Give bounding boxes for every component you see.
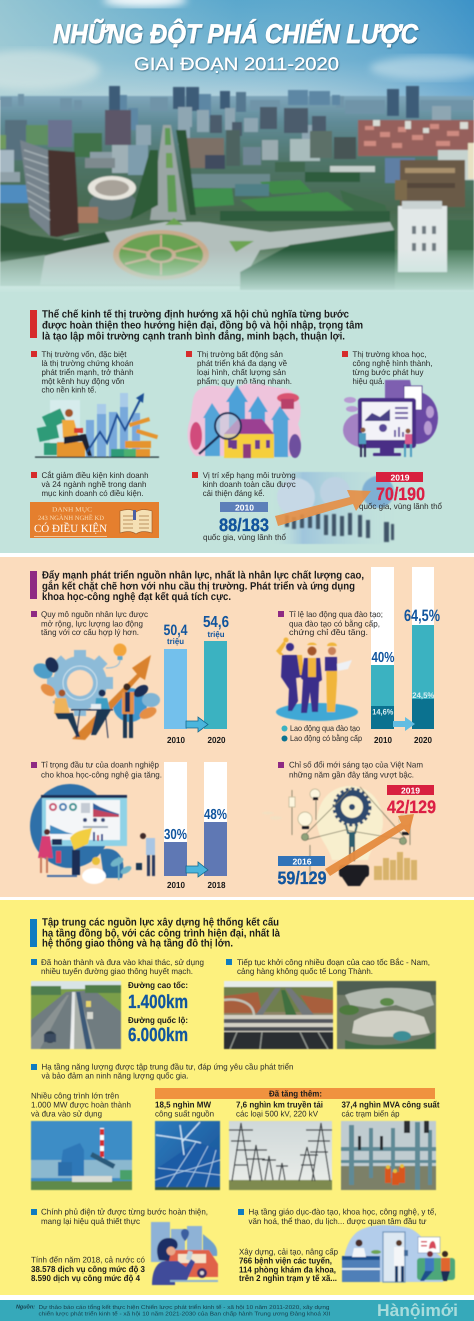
logo: Hanoimoi: Hànộimới — [377, 1301, 458, 1320]
arrow: innovation rise — [325, 814, 414, 876]
stat: 2010 ranking: quốc gia, vùng lãnh thổ — [203, 533, 286, 542]
legend: labour types: Lao động có bằng cấp — [290, 733, 362, 743]
stat: 2010 ranking: 2010 — [235, 502, 254, 512]
text: energy infrastructure: và bảo đảm an ninh năng lượng quốc gia. — [42, 1072, 188, 1081]
stat: 2019 ranking: 70/190 — [376, 484, 425, 504]
text: cut business conditions: Cắt giảm điều kiện kinh doanh — [42, 470, 149, 480]
text: social infrastructure: văn hoá, thể thao, du lịch... được quan tâm đầu tư — [248, 1217, 427, 1226]
section heading 3 — [30, 917, 280, 950]
section heading 2 — [30, 570, 364, 603]
bar chart: science investment 30 to 48 percent: 2018 — [208, 880, 226, 890]
bar chart: workforce 50.4 to 54.6 million: triệu — [208, 630, 225, 639]
bar chart: trained labour 40 to 64.5 percent — [371, 567, 440, 745]
text: cut business conditions — [31, 470, 149, 498]
arrow: growth — [186, 717, 208, 732]
text: workforce size: mở rộng, lực lượng lao động — [41, 619, 143, 628]
green patches left — [26, 125, 48, 145]
text: online public services: 38.578 dịch vụ công mức độ 3 — [31, 1264, 145, 1274]
bar chart: science investment 30 to 48 percent — [164, 762, 227, 890]
stat: expressway and highway lengths: Đường cao tốc: — [128, 980, 188, 990]
text: real estate market: loại hình, chất lượng sản — [197, 368, 286, 377]
text: online public services — [31, 1256, 145, 1283]
text: workforce size: tăng với cơ cấu hợp lý hơn. — [41, 628, 139, 637]
text: source capacity: 18,5 nghìn MW — [155, 1100, 212, 1110]
text: trained labour ratio: Tỉ lệ lao động qua đào tạo; — [289, 610, 383, 619]
text: innovation index: những năm gần đây tăng vượt bậc. — [289, 770, 414, 779]
panel: hero photo of Hanoi skyline — [0, 0, 474, 294]
text: large plants: Nhiều công trình lớn trên — [31, 1092, 119, 1100]
bar chart: workforce 50.4 to 54.6 million — [164, 614, 229, 745]
icon: innovation light bulb with gear — [262, 786, 417, 886]
text: online public services: Tính đến năm 2018, cả nước có — [31, 1256, 145, 1265]
section heading 2: khoa học-công nghệ đạt kết quả tích cực. — [42, 591, 231, 603]
dome — [89, 190, 137, 220]
bar chart: workforce 50.4 to 54.6 million: 54,6 — [203, 614, 229, 631]
stat: expressway and highway lengths: 1.400km — [128, 992, 188, 1013]
text: hospital upgrades: Xây dựng, cải tạo, nâng cấp — [239, 1247, 338, 1256]
text: science market — [342, 350, 432, 386]
text: science market: từng bước phát huy — [352, 368, 424, 377]
section heading 2: gắn kết chặt chẽ hơn với nhu cầu thị trường. Phát triển và ứng dụng — [42, 580, 355, 592]
red roofs — [358, 120, 474, 156]
footer: source and logo — [0, 1300, 474, 1321]
text: cut business conditions: mục kinh doanh có điều kiện. — [42, 489, 144, 498]
callout: business conditions list: DANH MỤC — [52, 506, 92, 514]
photo: transmission towers — [229, 1121, 332, 1190]
arrow: investment growth — [186, 862, 208, 877]
bar chart: trained labour 40 to 64.5 percent: 2010 — [374, 735, 392, 745]
tower left — [20, 140, 50, 236]
legend: labour types: Lao động qua đào tạo — [290, 724, 360, 733]
text: north-south expressway: Tiếp tục khởi công nhiều đoạn của cao tốc Bắc - Nam, — [237, 957, 430, 967]
bar chart: trained labour 40 to 64.5 percent: 14,6% — [372, 707, 393, 716]
icon: data presentation and piggy bank — [30, 784, 155, 884]
text: large plants: và đưa vào sử dụng — [31, 1110, 102, 1119]
callout: business conditions list — [30, 502, 159, 538]
stat: 2019 ranking: quốc gia, vùng lãnh thổ — [359, 502, 442, 511]
text: e-government — [31, 1208, 208, 1226]
banner: additional capacity: Đã tăng thêm: — [269, 1088, 322, 1098]
text: energy infrastructure — [31, 1062, 294, 1081]
text: hospital upgrades — [239, 1247, 338, 1283]
white building — [398, 206, 447, 272]
text: trained labour ratio: chứng chỉ đều tăng. — [289, 628, 368, 637]
text: social infrastructure: Hạ tầng giáo dục-đào tạo, khoa học, công nghệ, y tế, — [248, 1208, 436, 1216]
text: transmission lines — [236, 1100, 323, 1119]
stat: 2019 index — [387, 785, 436, 817]
text: substations: các trạm biến áp — [342, 1110, 400, 1119]
section heading 2: Đẩy mạnh phát triển nguồn nhân lực, nhất là nhân lực chất lượng cao, — [42, 570, 364, 582]
stat: expressway and highway lengths: 6.000km — [128, 1025, 188, 1046]
text: hospital upgrades: trên 2 nghìn trạm y tế xã... — [239, 1273, 337, 1283]
text: trained labour ratio: qua đào tạo có bằng cấp, — [289, 618, 380, 628]
text: hospital upgrades: 766 bệnh viện các tuyến, — [239, 1255, 332, 1265]
section heading 1 — [30, 308, 363, 342]
text: workforce size: Quy mô nguồn nhân lực được — [41, 610, 148, 619]
text: real estate market: phẩm; quy mô tăng nhanh. — [197, 377, 292, 386]
text: source capacity: công suất nguồn — [155, 1110, 214, 1119]
text: social infrastructure — [238, 1208, 436, 1226]
bar chart: workforce 50.4 to 54.6 million: 2020 — [208, 735, 226, 745]
icon: team with gear and growth arrow — [31, 644, 160, 740]
photo: Long Thanh airport render — [337, 981, 436, 1049]
text: capital market: cho nền kinh tế. — [42, 386, 96, 394]
text: capital market — [31, 350, 134, 394]
text: substations — [342, 1100, 440, 1119]
text: online public services: 8.590 dịch vụ công mức độ 4 — [31, 1273, 140, 1283]
text: real estate market — [186, 350, 292, 386]
stat: 2019 index: 42/129 — [387, 797, 436, 817]
stat: expressway and highway lengths: Đường quốc lộ: — [128, 1015, 188, 1025]
bar chart: trained labour 40 to 64.5 percent: 64,5% — [404, 607, 440, 625]
callout: business conditions list: 243 NGÀNH NGHỀ KD — [38, 514, 104, 522]
text: trained labour ratio — [278, 610, 383, 637]
text: cut business conditions: và 24 ngành nghề trong danh — [42, 480, 147, 489]
stat: 2010 ranking — [203, 502, 286, 542]
text: completed roads: nhiều tuyến đường giao thông huyết mạch. — [41, 967, 193, 976]
mid blocks centre — [186, 138, 224, 168]
text: science market: công nghệ hình thành, — [352, 359, 432, 368]
roundabout — [113, 230, 209, 280]
text: business ranking: cải thiện đáng kể. — [203, 489, 265, 498]
text: science investment: Tỉ trọng đầu tư của doanh nghiệp — [41, 761, 159, 770]
plaza — [0, 222, 395, 285]
section heading 1: được hoàn thiện theo hướng hiện đại, đồng bộ và hội nhập, trọng tâm — [42, 320, 363, 332]
section heading 3: hệ thống giao thông và hạ tầng đô thị lớn. — [42, 938, 233, 950]
text: business ranking: Vị trí xếp hạng môi trường — [203, 471, 296, 480]
photo: expressway — [31, 981, 121, 1049]
photo: expressway interchange — [224, 981, 333, 1049]
section heading 3: Tập trung các nguồn lực xây dựng hệ thống kết cấu — [42, 917, 279, 929]
photo: global ranking with globes and people — [271, 472, 400, 544]
bar chart: workforce 50.4 to 54.6 million: 50,4 — [164, 622, 188, 639]
text: completed roads — [31, 958, 204, 976]
text: e-government: mang lại hiệu quả thiết thực — [41, 1217, 140, 1226]
central road — [150, 125, 186, 220]
section heading 1: là tạo lập môi trường cạnh tranh bình đẳng, minh bạch, thuận lợi. — [42, 330, 345, 342]
section heading 1: Thể chế kinh tế thị trường định hướng xã hội chủ nghĩa từng bước — [42, 308, 349, 320]
text: energy infrastructure: Hạ tầng năng lượng được tập trung đầu tư, đáp ứng yêu cầu phát triển — [42, 1062, 294, 1071]
bar chart: trained labour 40 to 64.5 percent: 2020 — [414, 735, 432, 745]
stat: 2016 index — [278, 856, 326, 888]
legend: labour types — [282, 724, 362, 743]
text: business ranking — [192, 471, 296, 498]
bar chart: trained labour 40 to 64.5 percent: 40% — [372, 650, 395, 666]
text: substations: 37,4 nghìn MVA công suất — [342, 1100, 440, 1110]
text: hospital upgrades: 114 phòng khám đa khoa, — [239, 1264, 336, 1274]
text: source capacity — [155, 1100, 214, 1119]
text: capital market: Thị trường vốn, đặc biệt — [42, 350, 127, 359]
photo: substation with workers — [341, 1121, 436, 1190]
bar chart: trained labour 40 to 64.5 percent: 24,5% — [412, 691, 434, 700]
stat: 2019 index: 2019 — [401, 786, 420, 796]
text: workforce size — [31, 610, 148, 637]
text: completed roads: Đã hoàn thành và đưa vào khai thác, sử dụng — [41, 958, 204, 967]
text: real estate market: Thị trường bất động sản — [197, 350, 283, 359]
icon: hospital reception — [342, 1225, 455, 1282]
stat: 2019 ranking: 2019 — [390, 472, 410, 482]
stat: expressway and highway lengths — [128, 980, 188, 1046]
arrow: ranking improvement — [275, 490, 371, 526]
text: business ranking: kinh doanh toàn cầu được — [203, 480, 296, 489]
stat: 2019 ranking — [359, 472, 442, 511]
text: real estate market: phát triển khá đa dạng về — [197, 359, 287, 368]
text: transmission lines: các loại 500 kV, 220 kV — [236, 1110, 319, 1119]
panel: market institutions — [0, 292, 474, 553]
callout: business conditions list: CÓ ĐIỀU KIỆN — [34, 522, 107, 535]
text: north-south expressway: cảng hàng không quốc tế Long Thành. — [237, 967, 373, 976]
icon: houses and magnifier — [188, 384, 301, 458]
photo: solar panels — [155, 1121, 220, 1190]
text: e-government: Chính phủ điện tử được từng bước hoàn thiện, — [41, 1208, 208, 1216]
stat: 2016 index: 2016 — [292, 856, 312, 866]
arrow: trained labour growth — [393, 717, 415, 731]
stat: 2010 ranking: 88/183 — [219, 515, 269, 535]
icon: investor with rising chart — [35, 393, 159, 458]
banner: additional capacity — [155, 1088, 435, 1099]
panel: human resources — [0, 557, 474, 897]
text: transmission lines: 7,6 nghìn km truyền tải — [236, 1100, 323, 1110]
text: capital market: phát triển mạnh, trở thành — [42, 368, 134, 377]
text: science investment — [31, 761, 162, 779]
title: NHỮNG ĐỘT PHÁ CHIẾN LƯỢC — [53, 18, 418, 49]
photo: power plant — [31, 1121, 132, 1190]
back row — [0, 94, 474, 114]
text: large plants: 1.000 MW được hoàn thành — [31, 1100, 131, 1110]
bar chart: science investment 30 to 48 percent: 48% — [204, 807, 227, 823]
footer: source and logo: Nguồn: — [16, 1303, 35, 1310]
text: science market: hiệu quả. — [352, 377, 384, 386]
bar chart: workforce 50.4 to 54.6 million: triệu — [167, 637, 184, 646]
trees — [0, 225, 110, 262]
text: capital market: là thị trường chứng khoán — [42, 359, 134, 368]
middle towers — [136, 106, 451, 145]
trees mid — [305, 172, 360, 182]
text: innovation index: Chỉ số đổi mới sáng tạo của Việt Nam — [289, 761, 423, 770]
text: science investment: cho khoa học-công nghệ gia tăng. — [41, 770, 162, 779]
text: innovation index — [278, 761, 423, 779]
text: science market: Thị trường khoa học, — [352, 350, 426, 359]
icon: open book — [120, 510, 152, 534]
fields — [193, 188, 234, 207]
icon: three workers — [276, 638, 358, 721]
bar chart: workforce 50.4 to 54.6 million: 2010 — [167, 735, 185, 745]
text: large plants — [31, 1092, 131, 1119]
subtitle: GIAI ĐOẠN 2011-2020 — [134, 54, 339, 74]
footer: source and logo: Dự thảo báo cáo tổng kết thực hiện Chiến lược phát triển kinh tế - xã hội 10 năm 2011-2020, xây dựng — [38, 1304, 330, 1311]
bar chart: science investment 30 to 48 percent: 2010 — [167, 880, 185, 890]
panel: infrastructure — [0, 900, 474, 1295]
bar chart: science investment 30 to 48 percent: 30% — [164, 827, 187, 843]
footer: source and logo: chiến lược phát triển kinh tế - xã hội 10 năm 2021-2030 của Ban chấp hành Trung ương Đảng khoá XII — [38, 1310, 331, 1318]
text: north-south expressway — [226, 957, 430, 976]
icon: woman with phone and car — [151, 1222, 218, 1285]
text: capital market: một kênh huy động vốn — [42, 377, 125, 386]
icon: analytics monitor — [343, 380, 438, 457]
stat: 2016 index: 59/129 — [278, 868, 326, 888]
section heading 3: hạ tầng đồng bộ, với các công trình hiện đại, nhất là — [42, 928, 280, 940]
